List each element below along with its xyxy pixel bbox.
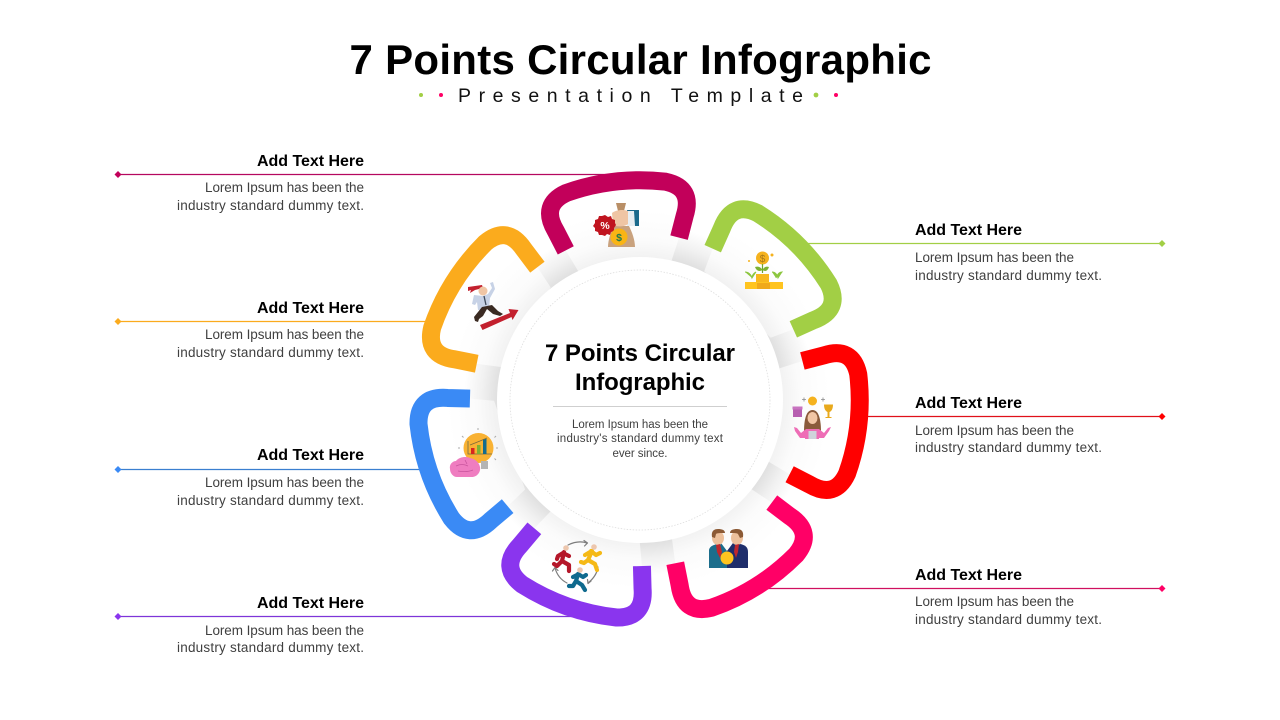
gray connector ring bbox=[464, 224, 816, 576]
icon: businessman running on arrow bbox=[468, 282, 518, 330]
text block: upper-middle left: industry standard dummy text. bbox=[177, 345, 364, 360]
text block: top right: industry standard dummy text. bbox=[915, 268, 1102, 283]
text block: bottom left: Add Text Here bbox=[257, 595, 364, 612]
petal: blue bbox=[407, 380, 532, 538]
text block: middle right: Add Text Here bbox=[915, 395, 1022, 412]
petal: green bbox=[689, 196, 846, 353]
text block: bottom right: Lorem Ipsum has been the bbox=[915, 594, 1074, 609]
text block: lower-middle left bbox=[177, 447, 364, 508]
text block: top right: Add Text Here bbox=[915, 222, 1022, 239]
text block: bottom right: Add Text Here bbox=[915, 567, 1022, 584]
hub body text: ever since. bbox=[612, 448, 668, 460]
text block: middle right bbox=[915, 395, 1102, 455]
central hub bbox=[497, 257, 783, 543]
leader line: orange bbox=[114, 318, 440, 325]
hub title: Infographic bbox=[575, 369, 705, 396]
text block: lower-middle left: industry standard dummy text. bbox=[177, 493, 364, 508]
icon: money plant bbox=[745, 252, 783, 289]
leader line: red bbox=[850, 413, 1166, 420]
leader line: crimson bbox=[114, 171, 640, 178]
petal: orange bbox=[417, 224, 562, 385]
text block: lower-middle left: Lorem Ipsum has been the bbox=[205, 475, 364, 490]
text block: middle right: industry standard dummy text. bbox=[915, 440, 1102, 455]
leader line: blue bbox=[114, 466, 430, 473]
text block: bottom left: Lorem Ipsum has been the bbox=[205, 623, 364, 638]
text block: top left: Add Text Here bbox=[257, 153, 364, 170]
petal: crimson bbox=[547, 174, 693, 274]
text block: top right bbox=[915, 222, 1102, 283]
icon: lightbulb and brain bbox=[450, 428, 498, 477]
icon: money bag: % bbox=[600, 220, 610, 232]
text block: bottom left bbox=[177, 595, 364, 655]
text block: upper-middle left: Lorem Ipsum has been the bbox=[205, 327, 364, 342]
text block: top right: Lorem Ipsum has been the bbox=[915, 250, 1074, 265]
hub title: 7 Points Circular bbox=[545, 340, 735, 367]
icon: money plant: $ bbox=[760, 254, 766, 265]
text block: middle right: Lorem Ipsum has been the bbox=[915, 423, 1074, 438]
text block: upper-middle left bbox=[177, 300, 364, 360]
petal: pink bbox=[654, 478, 815, 623]
text block: top left: Lorem Ipsum has been the bbox=[205, 180, 364, 195]
leader line: purple bbox=[114, 613, 590, 620]
text block: top left bbox=[177, 153, 364, 213]
text block: bottom right: industry standard dummy text. bbox=[915, 612, 1102, 627]
leader line: green bbox=[800, 240, 1166, 247]
icon: money bag: $ bbox=[616, 232, 622, 244]
icon: two businessmen with coin bbox=[709, 529, 748, 568]
subtitle with dots: Presentation Template bbox=[458, 85, 803, 107]
petal: purple bbox=[503, 504, 660, 629]
icon: money bag bbox=[593, 203, 639, 247]
icon: runners in a cycle bbox=[552, 540, 600, 590]
hub body text: Lorem Ipsum has been the bbox=[572, 419, 708, 431]
petal: red bbox=[766, 347, 866, 493]
hub body text bbox=[557, 419, 724, 460]
icon: woman with trophy bbox=[792, 396, 833, 439]
hub body text: industry's standard dummy text bbox=[557, 433, 724, 445]
text block: lower-middle left: Add Text Here bbox=[257, 447, 364, 464]
text block: bottom left: industry standard dummy text. bbox=[177, 640, 364, 655]
leader line: pink bbox=[750, 585, 1166, 592]
hub title bbox=[545, 340, 735, 396]
title: 7 Points Circular Infographic bbox=[350, 36, 932, 83]
text block: upper-middle left: Add Text Here bbox=[257, 300, 364, 317]
text block: bottom right bbox=[915, 567, 1102, 627]
text block: top left: industry standard dummy text. bbox=[177, 198, 364, 213]
